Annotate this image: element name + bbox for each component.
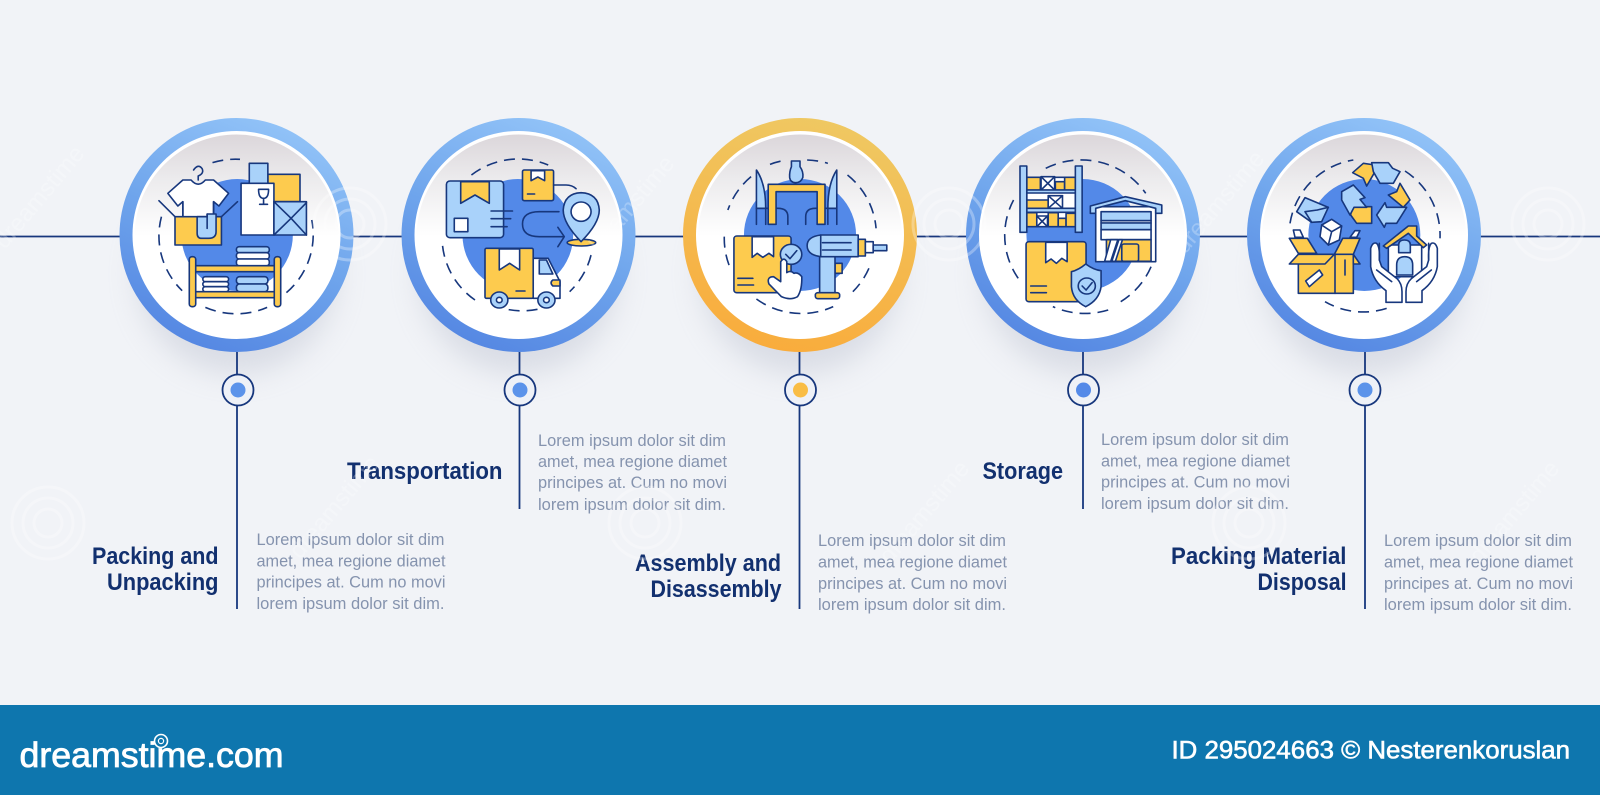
connector stem 1 (236, 352, 238, 609)
circle shadow 3 (700, 174, 900, 374)
watermark overlay: dreamstime (874, 455, 975, 569)
icon: racks, warehouse and protected box (1005, 160, 1162, 313)
heading 1 (92, 543, 218, 596)
text block 5: lorem ipsum dolor sit dim. (1384, 596, 1572, 614)
text block 5 (1384, 532, 1573, 614)
text block 4: Lorem ipsum dolor sit dim (1101, 431, 1289, 449)
text block 3: Lorem ipsum dolor sit dim (818, 532, 1006, 550)
text block 5: principes at. Cum no movi (1384, 575, 1573, 593)
text block 2: Lorem ipsum dolor sit dim (538, 432, 726, 450)
node 5 (1350, 374, 1380, 406)
text block 4: amet, mea regione diamet (1101, 452, 1290, 470)
connector stem 5 (1364, 352, 1366, 609)
icon: recycling, open box and house in hands (1289, 160, 1440, 312)
ring 4 (966, 118, 1200, 352)
text block 4: lorem ipsum dolor sit dim. (1101, 495, 1289, 513)
text block 2: lorem ipsum dolor sit dim. (538, 496, 726, 514)
text block 3 (818, 532, 1007, 614)
heading 3: Assembly and (635, 550, 781, 577)
heading 2: Transportation (347, 458, 502, 485)
text block 1: principes at. Cum no movi (256, 574, 446, 592)
heading 1: Unpacking (107, 569, 218, 596)
circle shadow 4 (983, 174, 1183, 374)
heading 3 (635, 550, 782, 603)
text block 1: Lorem ipsum dolor sit dim (256, 531, 444, 549)
text block 5: Lorem ipsum dolor sit dim (1384, 532, 1572, 550)
footer band (0, 705, 1600, 795)
watermark overlay: dreamstime (579, 150, 680, 264)
watermark overlay: dreamstime (1464, 455, 1565, 569)
heading 3: Disassembly (650, 576, 782, 603)
panel: step 2 transportation (347, 118, 727, 514)
node 1 (222, 374, 254, 406)
watermark overlay: dreamstime (284, 450, 385, 564)
circle shadow 5 (1264, 174, 1464, 374)
ring 2 (402, 118, 636, 352)
ring 3 (683, 118, 917, 352)
icon: delivery box, route and truck (442, 159, 599, 311)
text block 3: principes at. Cum no movi (818, 575, 1007, 593)
watermark overlay: dreamstime (1169, 145, 1270, 259)
icon: furniture, box and drill (724, 160, 887, 313)
node 3 (785, 374, 816, 406)
icon: clothes, boxes and shelf (159, 159, 313, 314)
ring 1 (120, 118, 354, 352)
text block 1: lorem ipsum dolor sit dim. (256, 595, 444, 613)
text block 4: principes at. Cum no movi (1101, 474, 1290, 492)
panel: step 1 packing and unpacking (92, 118, 446, 613)
ring 5 (1247, 118, 1481, 352)
node 4 (1068, 374, 1099, 406)
circle shadow 2 (419, 174, 619, 374)
footer logo: dreamstime.com (20, 736, 284, 775)
heading 5 (1171, 543, 1346, 596)
panel: step 3 assembly and disassembly (635, 118, 1007, 614)
node 2 (504, 374, 536, 406)
connector stem 4 (1082, 352, 1084, 509)
connector stem 3 (798, 352, 800, 609)
heading 4: Storage (982, 458, 1063, 485)
watermark overlay (0, 140, 1584, 569)
horizontal timeline (0, 236, 1600, 238)
text block 4 (1101, 431, 1290, 513)
text block 3: amet, mea regione diamet (818, 554, 1007, 572)
panel: step 5 packing material disposal (1171, 118, 1573, 614)
heading 5: Disposal (1258, 569, 1346, 596)
text block 3: lorem ipsum dolor sit dim. (818, 596, 1006, 614)
text block 2: amet, mea regione diamet (538, 453, 727, 471)
footer image id and author: ID 295024663 © Nesterenkoruslan (1172, 736, 1570, 764)
heading 5: Packing Material (1171, 543, 1346, 570)
circle shadow 1 (137, 174, 337, 374)
text block 5: amet, mea regione diamet (1384, 554, 1573, 572)
heading 1: Packing and (92, 543, 218, 570)
text block 2: principes at. Cum no movi (538, 474, 727, 492)
text block 1: amet, mea regione diamet (256, 552, 446, 570)
text block 1 (256, 531, 446, 613)
panel: step 4 storage (966, 118, 1290, 513)
text block 2 (538, 432, 727, 514)
connector stem 2 (518, 352, 520, 509)
